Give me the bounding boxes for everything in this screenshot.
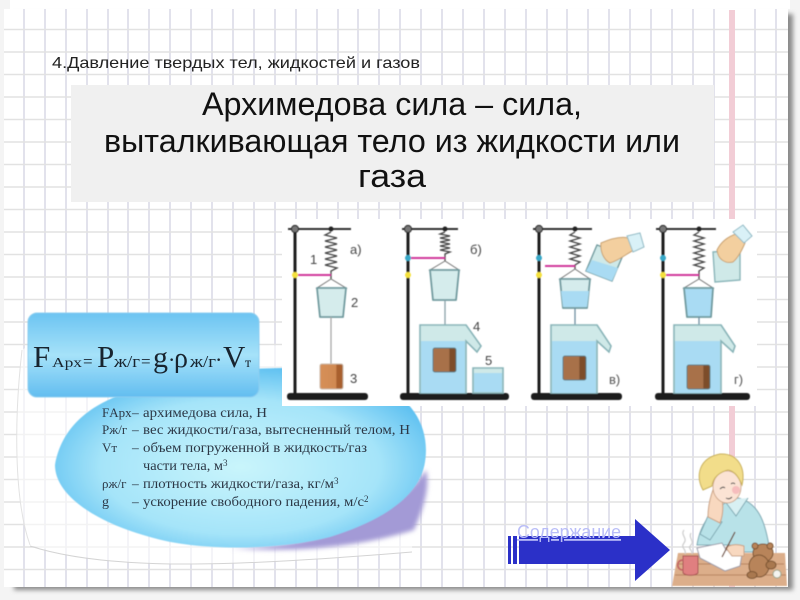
formula: = (141, 352, 151, 371)
stand g: г) (734, 372, 743, 387)
formula: · (168, 347, 175, 372)
legend ellipse with symbol definitions (55, 368, 426, 548)
stand a: 1 (310, 252, 317, 267)
legend text: 2 (364, 494, 368, 504)
stand a: 2 (351, 295, 358, 310)
stand b: 4 (473, 319, 480, 334)
stand a: 3 (350, 371, 357, 386)
definition text: выталкивающая тело из жидкости или (104, 123, 680, 159)
formula: ж/г (113, 352, 140, 371)
mug (683, 556, 698, 575)
legend text: плотность жидкости/газа, кг/м (143, 476, 334, 491)
legend text: – (131, 405, 139, 420)
stand v: в) (609, 372, 620, 387)
definition text: Архимедова сила – сила, (202, 86, 582, 122)
formula: · (215, 347, 222, 372)
stand a: а) (350, 242, 362, 257)
legend text: – (131, 476, 139, 491)
stand b (400, 225, 509, 400)
legend text: Рж/г (102, 422, 127, 437)
definition text: газа (358, 158, 426, 194)
legend text (102, 405, 410, 510)
legend text: архимедова сила, Н (143, 405, 267, 420)
formula (33, 339, 251, 374)
stand b: б) (470, 242, 482, 257)
curled paper behind the legend (17, 345, 414, 564)
legend text: 3 (223, 458, 228, 468)
legend text: – (131, 440, 139, 455)
legend text: g (102, 495, 109, 510)
legend text: объем погруженной в жидкость/газ (143, 440, 367, 455)
legend text: – (131, 422, 139, 437)
formula: ρ (174, 343, 188, 374)
writing hand (726, 545, 744, 556)
stand v (531, 225, 644, 400)
formula: = (83, 352, 93, 371)
illustration: girl at desk (672, 454, 787, 586)
stand g (655, 225, 752, 400)
formula: ж/г (189, 352, 216, 371)
formula panel (28, 313, 259, 397)
formula: т (245, 356, 251, 371)
open book (697, 543, 742, 571)
legend text: Vт (102, 440, 117, 455)
legend text: ρж/г (102, 476, 126, 491)
legend text: FАрх (102, 405, 132, 420)
hand holding empty glass (713, 225, 752, 282)
face (713, 471, 741, 503)
legend shadow (230, 470, 427, 550)
stand b: 5 (485, 353, 492, 368)
formula: Арх (52, 356, 82, 371)
navigation arrow (508, 519, 670, 581)
desk (672, 553, 787, 586)
legend text: – (131, 494, 139, 509)
definition text (104, 86, 680, 194)
flower (773, 570, 781, 578)
definition box (71, 85, 714, 202)
shirt (697, 498, 770, 552)
teddy bear (753, 544, 773, 562)
link text: Содержание (517, 522, 621, 542)
stand a (287, 225, 368, 400)
legend text: части тела, м (143, 458, 223, 473)
formula: P (97, 339, 114, 374)
hair (699, 454, 743, 490)
raised arm (700, 516, 722, 540)
experiment diagram (282, 219, 757, 406)
formula: g (153, 341, 168, 374)
legend text: ускорение свободного падения, м/с (143, 494, 364, 509)
formula: V (223, 339, 246, 374)
hand pouring glass (586, 233, 644, 281)
legend text: 3 (334, 476, 339, 486)
formula: F (33, 339, 50, 374)
slide heading: 4.Давление твердых тел, жидкостей и газов (52, 55, 420, 72)
legend text: вес жидкости/газа, вытесненный телом, Н (143, 422, 410, 437)
